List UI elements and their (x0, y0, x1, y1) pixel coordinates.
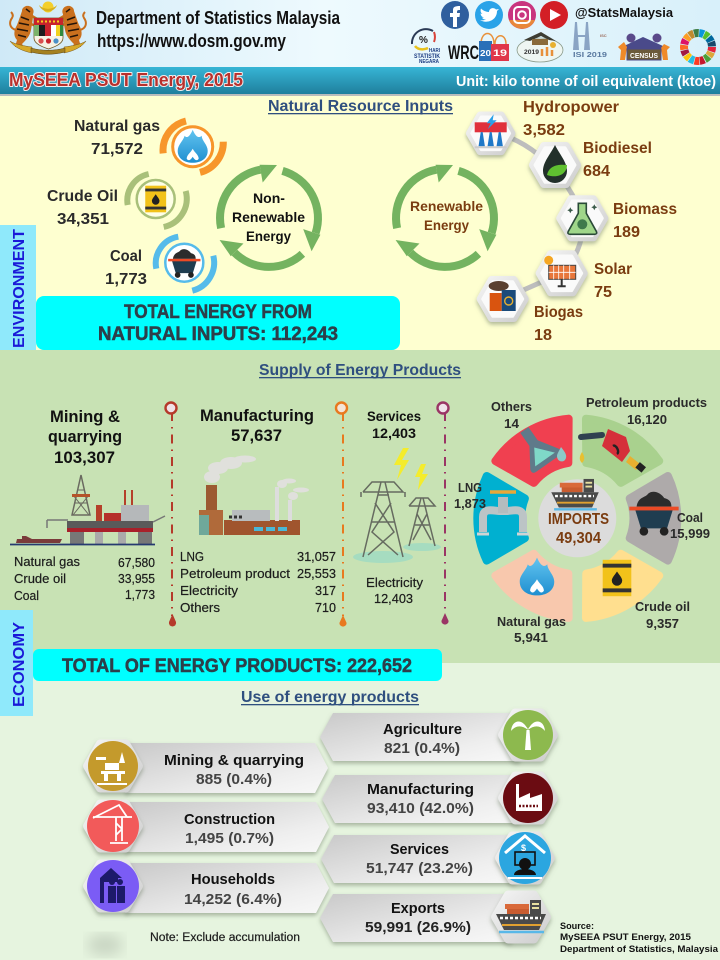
label: imports total: IMPORTS (548, 511, 609, 528)
icon: imports ship (551, 479, 599, 509)
table: manufacturing (180, 550, 336, 615)
bar: construction (87, 800, 329, 852)
table: mining and quarrying: Coal (14, 589, 39, 603)
table: manufacturing: Others (180, 601, 220, 615)
label: hydropower: Hydropower (523, 99, 619, 116)
table: mining and quarrying (14, 555, 155, 603)
label: solar: 75 (594, 284, 612, 301)
label: crude oil: 34,351 (57, 211, 109, 228)
label: non-renewable energy: Non- (253, 190, 285, 206)
label: biodiesel: 684 (583, 163, 610, 180)
source: MySEEA PSUT Energy, 2015 (560, 932, 692, 943)
icon: coal cart (629, 492, 679, 536)
label: natural gas imports: Natural gas (497, 614, 566, 629)
social handle: @StatsMalaysia (575, 5, 674, 20)
title bar (0, 67, 720, 96)
label: natural gas imports (497, 614, 566, 645)
header band (0, 0, 720, 67)
bar: exports: 59,991 (26.9%) (365, 919, 471, 936)
table: manufacturing: Electricity (180, 584, 239, 598)
icon: barrel (603, 560, 631, 596)
logo: census (618, 34, 670, 60)
label: electricity: 12,403 (374, 592, 413, 606)
label: crude oil imports: 9,357 (646, 616, 679, 631)
bar: agriculture (320, 710, 553, 761)
divider pin: red (166, 402, 176, 626)
label: crude oil (47, 188, 118, 228)
label: LNG (454, 480, 486, 511)
bar: households (87, 860, 329, 913)
label: natural gas: 71,572 (91, 141, 143, 158)
column heading: manufacturing (200, 406, 314, 445)
icon: Malaysia coat of arms (10, 2, 86, 54)
label: hydropower (523, 99, 619, 139)
logo: WRC 2019: WRC (448, 43, 479, 64)
label: petroleum products (586, 395, 707, 427)
label: hydropower: 3,582 (523, 122, 565, 139)
table: mining and quarrying: 1,773 (125, 588, 155, 602)
icon: solar (540, 254, 584, 292)
label: coal (105, 248, 147, 288)
icon: flame (520, 557, 554, 595)
table: mining and quarrying: Natural gas (14, 555, 80, 569)
label: non-renewable energy (232, 190, 305, 244)
bar: construction: Construction (184, 811, 275, 828)
label: others: 14 (504, 416, 520, 431)
label: renewable energy (410, 198, 483, 233)
header url: https://www.dosm.gov.my (97, 31, 286, 51)
logo: Hari Statistik Negara: % (419, 35, 428, 46)
label: petroleum products: 16,120 (627, 412, 667, 427)
label: non-renewable energy: Energy (246, 228, 291, 244)
column heading: manufacturing: 57,637 (231, 426, 282, 445)
label: biogas (534, 304, 583, 344)
bar: mining and quarrying: 885 (0.4%) (196, 771, 272, 788)
label: renewable energy: Energy (424, 217, 469, 233)
icon: pipeline valve (477, 492, 529, 534)
label: imports total (548, 511, 609, 547)
label: biodiesel: Biodiesel (583, 140, 652, 157)
connector: renewable chain (490, 133, 583, 299)
label: coal: 1,773 (105, 271, 147, 288)
logo: SDG wheel (678, 27, 718, 67)
logo: WRC 2019 (448, 34, 509, 64)
icon: fuel pump nozzle (580, 429, 646, 473)
label: LNG: 1,873 (454, 496, 486, 511)
imports hub (538, 479, 616, 557)
bar: services use: Services (390, 841, 449, 858)
logo: household survey: 2019 (524, 50, 540, 56)
label: others: Others (491, 399, 532, 414)
label: coal imports: 15,999 (670, 526, 710, 541)
divider pin: orange (336, 402, 347, 627)
logo: ISI 2019: ISI 2019 (573, 50, 607, 59)
logo: WRC 2019: 20 (480, 49, 492, 58)
logo: census: CENSUS (630, 53, 658, 60)
callout: total of energy products: TOTAL OF ENERGY PRODUCTS: 222,652 (62, 656, 412, 677)
icon: twitter (475, 1, 503, 29)
logo: ISI 2019: ISC (600, 33, 607, 38)
label: coal: Coal (110, 248, 142, 265)
logo: ISI 2019 (573, 22, 607, 59)
bar: construction: 1,495 (0.7%) (185, 830, 274, 847)
panel: supply of energy products (0, 350, 720, 663)
table: mining and quarrying: 67,580 (118, 556, 155, 570)
label: natural gas imports: 5,941 (514, 630, 548, 645)
label: biomass: 189 (613, 224, 640, 241)
table: mining and quarrying: Crude oil (14, 572, 66, 586)
column heading: mining and quarrying: 103,307 (54, 448, 115, 467)
bar: mining and quarrying: Mining & quarrying (164, 752, 304, 769)
logo: household survey (517, 32, 563, 62)
title bar heading: MySEEA PSUT Energy, 2015 (9, 70, 243, 90)
column heading: mining and quarrying: quarrying (48, 427, 122, 446)
bar: exports (320, 894, 546, 942)
column heading: services: Services (367, 408, 421, 424)
table: manufacturing: Petroleum product (180, 567, 291, 581)
label: crude oil imports: Crude oil (635, 599, 690, 614)
label: biodiesel (583, 140, 652, 180)
bar: services use (321, 832, 551, 884)
label: natural gas (74, 118, 160, 158)
column heading: mining and quarrying (48, 407, 122, 467)
illustration: oil rig (10, 475, 165, 544)
bar: manufacturing use: 93,410 (42.0%) (367, 800, 474, 817)
bar: agriculture: Agriculture (383, 721, 462, 738)
bar: households: 14,252 (6.4%) (184, 891, 282, 908)
column heading: services (367, 408, 421, 441)
label: solar (594, 261, 632, 301)
source (560, 921, 719, 955)
bar: exports: Exports (391, 900, 445, 917)
table: manufacturing: 25,553 (297, 567, 336, 581)
table: manufacturing: 31,057 (297, 550, 336, 564)
icon: biomass (560, 199, 604, 237)
source: Department of Statistics, Malaysia (560, 944, 719, 955)
column heading: manufacturing: Manufacturing (200, 406, 314, 425)
label: petroleum products: Petroleum products (586, 395, 707, 410)
label: biogas: Biogas (534, 304, 583, 321)
icon: natural gas ring (163, 121, 223, 172)
icon: hydropower (470, 114, 512, 151)
panel: use of energy products (87, 689, 719, 956)
label: electricity (366, 576, 424, 606)
source: Source: (560, 921, 594, 932)
decorative smudge (87, 934, 123, 956)
logo: Hari Statistik Negara: HARI (429, 48, 441, 54)
callout: total energy from natural inputs: NATURAL INPUTS: 112,243 (98, 324, 338, 345)
bar: agriculture: 821 (0.4%) (384, 740, 460, 757)
label: crude oil: Crude Oil (47, 188, 118, 205)
note: Note: Exclude accumulation (150, 932, 300, 944)
label: coal imports: Coal (677, 510, 703, 525)
table: mining and quarrying: 33,955 (118, 572, 155, 586)
panel: natural resource inputs (0, 96, 720, 350)
icon: biogas (481, 280, 525, 318)
bar: households: Households (191, 871, 275, 888)
bar: manufacturing use: Manufacturing (367, 781, 474, 798)
label: biogas: 18 (534, 327, 552, 344)
label: renewable energy: Renewable (410, 198, 483, 214)
logo: WRC 2019: 19 (493, 48, 507, 58)
column heading: services: 12,403 (372, 425, 416, 441)
table: manufacturing: LNG (180, 550, 204, 564)
icon: facebook (441, 1, 469, 29)
icon: coal ring (156, 237, 214, 291)
icon: instagram (508, 1, 536, 29)
tab: environment (0, 225, 36, 350)
table: manufacturing: 317 (315, 584, 336, 598)
label: LNG: LNG (458, 480, 482, 495)
icon: youtube (540, 1, 568, 29)
tab: economy (0, 610, 33, 716)
label: biomass (613, 201, 677, 241)
label: imports total: 49,304 (556, 530, 601, 547)
illustration: power pylons (353, 448, 441, 563)
callout: total energy from natural inputs (36, 296, 400, 350)
logo: Hari Statistik Negara: STATISTIK (414, 54, 441, 60)
icon: crude oil ring (127, 174, 187, 227)
label: solar: Solar (594, 261, 632, 278)
table: manufacturing: 710 (315, 601, 336, 615)
heading: natural resource inputs: Natural Resource Inputs (268, 98, 453, 115)
header title: Department of Statistics Malaysia (96, 8, 341, 28)
heading: use of energy products: Use of energy products (241, 689, 419, 706)
label: crude oil imports (635, 599, 690, 631)
heading: supply of energy products: Supply of Energy Products (259, 362, 461, 379)
chart: imports wheel (477, 411, 679, 626)
tab: economy: ECONOMY (11, 622, 28, 707)
label: others (491, 399, 532, 431)
icon: flask (509, 416, 573, 481)
divider pin: purple (438, 402, 449, 625)
bar: manufacturing use (322, 773, 553, 823)
bar: services use: $ (521, 843, 526, 853)
icon: biodiesel (533, 145, 577, 184)
logo: Hari Statistik Negara: NEGARA (419, 59, 439, 65)
bar: services use: 51,747 (23.2%) (366, 860, 473, 877)
icon: renewable cycle (396, 165, 496, 267)
illustration: factory (199, 456, 309, 535)
label: natural gas: Natural gas (74, 118, 160, 135)
label: biomass: Biomass (613, 201, 677, 218)
logo: Hari Statistik Negara (412, 29, 441, 65)
bar: mining and quarrying (88, 741, 328, 793)
label: non-renewable energy: Renewable (232, 209, 305, 225)
callout: total of energy products (33, 649, 442, 681)
label: electricity: Electricity (366, 576, 424, 590)
label: coal imports (670, 510, 710, 541)
icon: non-renewable cycle (220, 165, 320, 267)
column heading: mining and quarrying: Mining & (50, 407, 120, 426)
tab: environment: ENVIRONMENT (11, 229, 28, 348)
callout: total energy from natural inputs: TOTAL ENERGY FROM (124, 302, 312, 323)
